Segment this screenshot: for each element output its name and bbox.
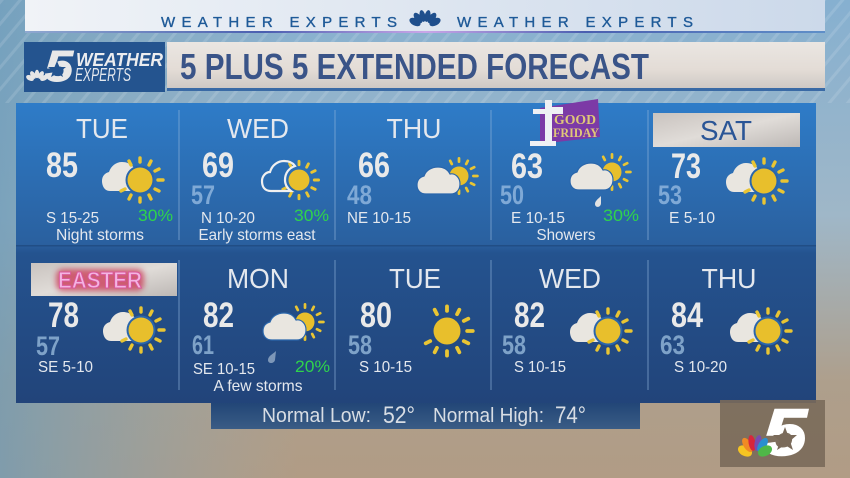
day: Monday: SE 10-15 xyxy=(193,361,255,378)
day: next Tuesday xyxy=(348,263,473,376)
day: Easter xyxy=(31,263,177,376)
banner text left: WEATHER EXPERTS xyxy=(161,14,397,31)
day: Good Friday: 50 xyxy=(500,180,524,210)
day: Saturday: SAT xyxy=(700,115,752,146)
day: Tuesday: Night storms xyxy=(56,227,144,244)
icon: rain drop xyxy=(595,196,601,207)
day: Good Friday: E 10-15 xyxy=(511,210,565,227)
icon: peacock white xyxy=(25,70,49,82)
normal temperatures strip: Normal Low: xyxy=(262,405,371,427)
day: Thursday: 66 xyxy=(358,146,390,185)
day: next Wednesday xyxy=(502,263,631,376)
day: Saturday xyxy=(653,113,800,227)
day: next Tuesday: TUE xyxy=(389,263,441,294)
day: Tuesday: TUE xyxy=(76,113,128,144)
icon: good friday sign: GOOD xyxy=(554,113,596,128)
normal temperatures strip: Normal High: xyxy=(433,405,544,427)
day: Wednesday: Early storms east xyxy=(198,227,316,244)
day: Thursday xyxy=(347,113,477,227)
day: Monday: 20% xyxy=(295,357,330,376)
day: Monday: 82 xyxy=(203,296,234,335)
day: next Thursday: 63 xyxy=(660,330,685,360)
station logo block xyxy=(24,42,165,92)
day: Tuesday xyxy=(46,113,173,244)
day: Saturday: E 5-10 xyxy=(669,210,715,227)
numeral five: 5 xyxy=(763,395,809,469)
day: next Tuesday: S 10-15 xyxy=(359,359,412,376)
day: Monday: A few storms xyxy=(214,378,302,395)
day: Thursday: 48 xyxy=(347,180,372,210)
day: Wednesday: WED xyxy=(227,113,289,144)
title bar xyxy=(167,42,825,91)
day: next Thursday: 84 xyxy=(671,296,703,335)
day: next Wednesday: 82 xyxy=(514,296,545,335)
day: Good Friday: 63 xyxy=(511,147,543,186)
day: next Thursday: S 10-20 xyxy=(674,359,727,376)
day: next Tuesday: 80 xyxy=(360,296,392,335)
normal temperatures strip xyxy=(211,402,640,429)
day: next Wednesday: WED xyxy=(539,263,601,294)
normal temperatures strip: 74° xyxy=(555,402,586,429)
day: next Thursday xyxy=(660,263,791,376)
icon: peacock xyxy=(408,10,442,28)
day: Wednesday xyxy=(191,113,329,244)
day: Good Friday xyxy=(500,99,639,244)
logo numeral: 5 xyxy=(45,42,74,91)
top banner xyxy=(25,0,825,33)
icon: good friday sign: FRIDAY xyxy=(553,125,600,140)
day: Tuesday: S 15-25 xyxy=(46,210,99,227)
day: next Thursday: THU xyxy=(702,263,756,294)
icon: star xyxy=(773,427,797,450)
day: Monday: MON xyxy=(227,263,289,294)
logo wordmark: WEATHER xyxy=(76,50,163,70)
day: Wednesday: N 10-20 xyxy=(201,210,255,227)
day: Easter: 78 xyxy=(48,296,79,335)
day: Wednesday: 69 xyxy=(202,146,234,185)
day: Good Friday: 30% xyxy=(603,206,639,225)
day: Good Friday: Showers xyxy=(536,227,596,244)
banner text right: WEATHER EXPERTS xyxy=(457,14,693,31)
day: next Wednesday: S 10-15 xyxy=(514,359,566,376)
day: Wednesday: 57 xyxy=(191,180,215,210)
icon: rain drop xyxy=(268,351,276,363)
day: Tuesday: 30% xyxy=(138,206,173,225)
day: next Tuesday: 58 xyxy=(348,330,372,360)
normal temperatures strip: 52° xyxy=(383,402,415,429)
day: Thursday: THU xyxy=(386,113,442,144)
forecast panel xyxy=(16,99,816,403)
day: Saturday: 53 xyxy=(658,180,682,210)
day: Easter: SE 5-10 xyxy=(38,359,93,376)
title: 5 PLUS 5 EXTENDED FORECAST xyxy=(180,46,649,87)
icon: logo star xyxy=(48,61,66,77)
station bug xyxy=(720,395,825,469)
icon: colour peacock xyxy=(736,435,774,459)
day: Easter: 57 xyxy=(36,331,60,361)
day: Monday: 61 xyxy=(192,330,214,360)
day: next Wednesday: 58 xyxy=(502,330,526,360)
day: Tuesday: 85 xyxy=(46,146,78,185)
day: Easter: EASTER xyxy=(58,267,142,293)
icon: good friday sign xyxy=(530,99,600,146)
day: Saturday: 73 xyxy=(671,147,701,186)
day: Wednesday: 30% xyxy=(294,206,329,225)
station logo block: EXPERTS xyxy=(75,65,131,85)
day: Thursday: NE 10-15 xyxy=(347,210,411,227)
day: Monday xyxy=(192,263,330,395)
